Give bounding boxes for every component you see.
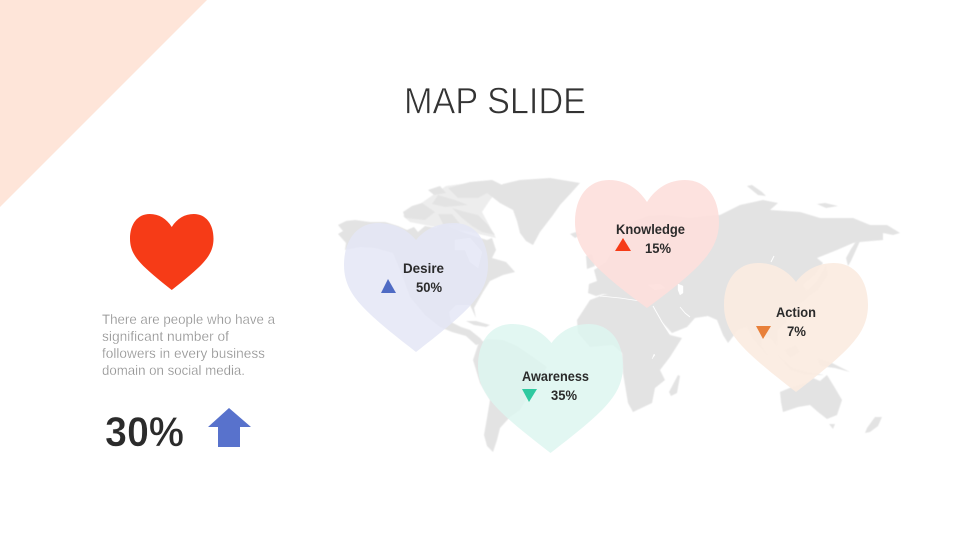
Madagascar — [669, 375, 680, 396]
description text: significant number of — [102, 328, 229, 344]
icon: red heart — [130, 214, 214, 290]
icon: green down triangle — [522, 389, 537, 402]
label: Action: Action — [776, 304, 816, 320]
icon: orange down triangle — [756, 326, 771, 339]
Japan — [806, 264, 828, 297]
Australia — [780, 375, 842, 419]
value: 50%: 50% — [416, 279, 443, 295]
description text: There are people who have a — [102, 311, 275, 327]
Britain — [586, 254, 595, 269]
Africa — [577, 293, 682, 412]
Iceland — [570, 232, 581, 238]
Cuba — [466, 321, 490, 327]
North America — [338, 220, 515, 345]
icon: red up triangle — [615, 238, 631, 251]
heart: Desire — [344, 223, 488, 352]
description text: domain on social media. — [102, 362, 245, 378]
label: Awareness: Awareness — [522, 368, 589, 384]
Eurasia — [588, 200, 900, 358]
South America — [473, 339, 547, 452]
Kamchatka — [846, 241, 860, 266]
Indonesia and New Guinea — [775, 345, 850, 375]
label: Knowledge: Knowledge — [616, 221, 685, 237]
world map — [338, 178, 900, 452]
Tasmania — [829, 424, 835, 429]
value: 7%: 7% — [787, 323, 807, 339]
icon: blue up triangle — [381, 279, 396, 293]
corner triangle decoration — [0, 0, 207, 207]
Arctic archipelago base — [403, 180, 502, 238]
Arctic islands — [403, 203, 435, 220]
heart: Awareness — [478, 324, 623, 453]
description text — [102, 311, 275, 378]
heart: Knowledge — [575, 180, 719, 308]
heart: Action — [724, 263, 868, 392]
icon: up arrow — [208, 408, 251, 447]
statistic: 30%: 30% — [105, 408, 184, 455]
description text: followers in every business — [102, 345, 265, 361]
value: 35%: 35% — [551, 387, 578, 403]
label: Desire: Desire — [403, 260, 444, 276]
title: MAP SLIDE — [404, 80, 586, 122]
value: 15%: 15% — [645, 240, 672, 256]
New Zealand — [865, 417, 882, 433]
Arctic Russian islands — [747, 185, 838, 208]
inland seas — [455, 238, 774, 359]
Greenland — [487, 178, 580, 245]
